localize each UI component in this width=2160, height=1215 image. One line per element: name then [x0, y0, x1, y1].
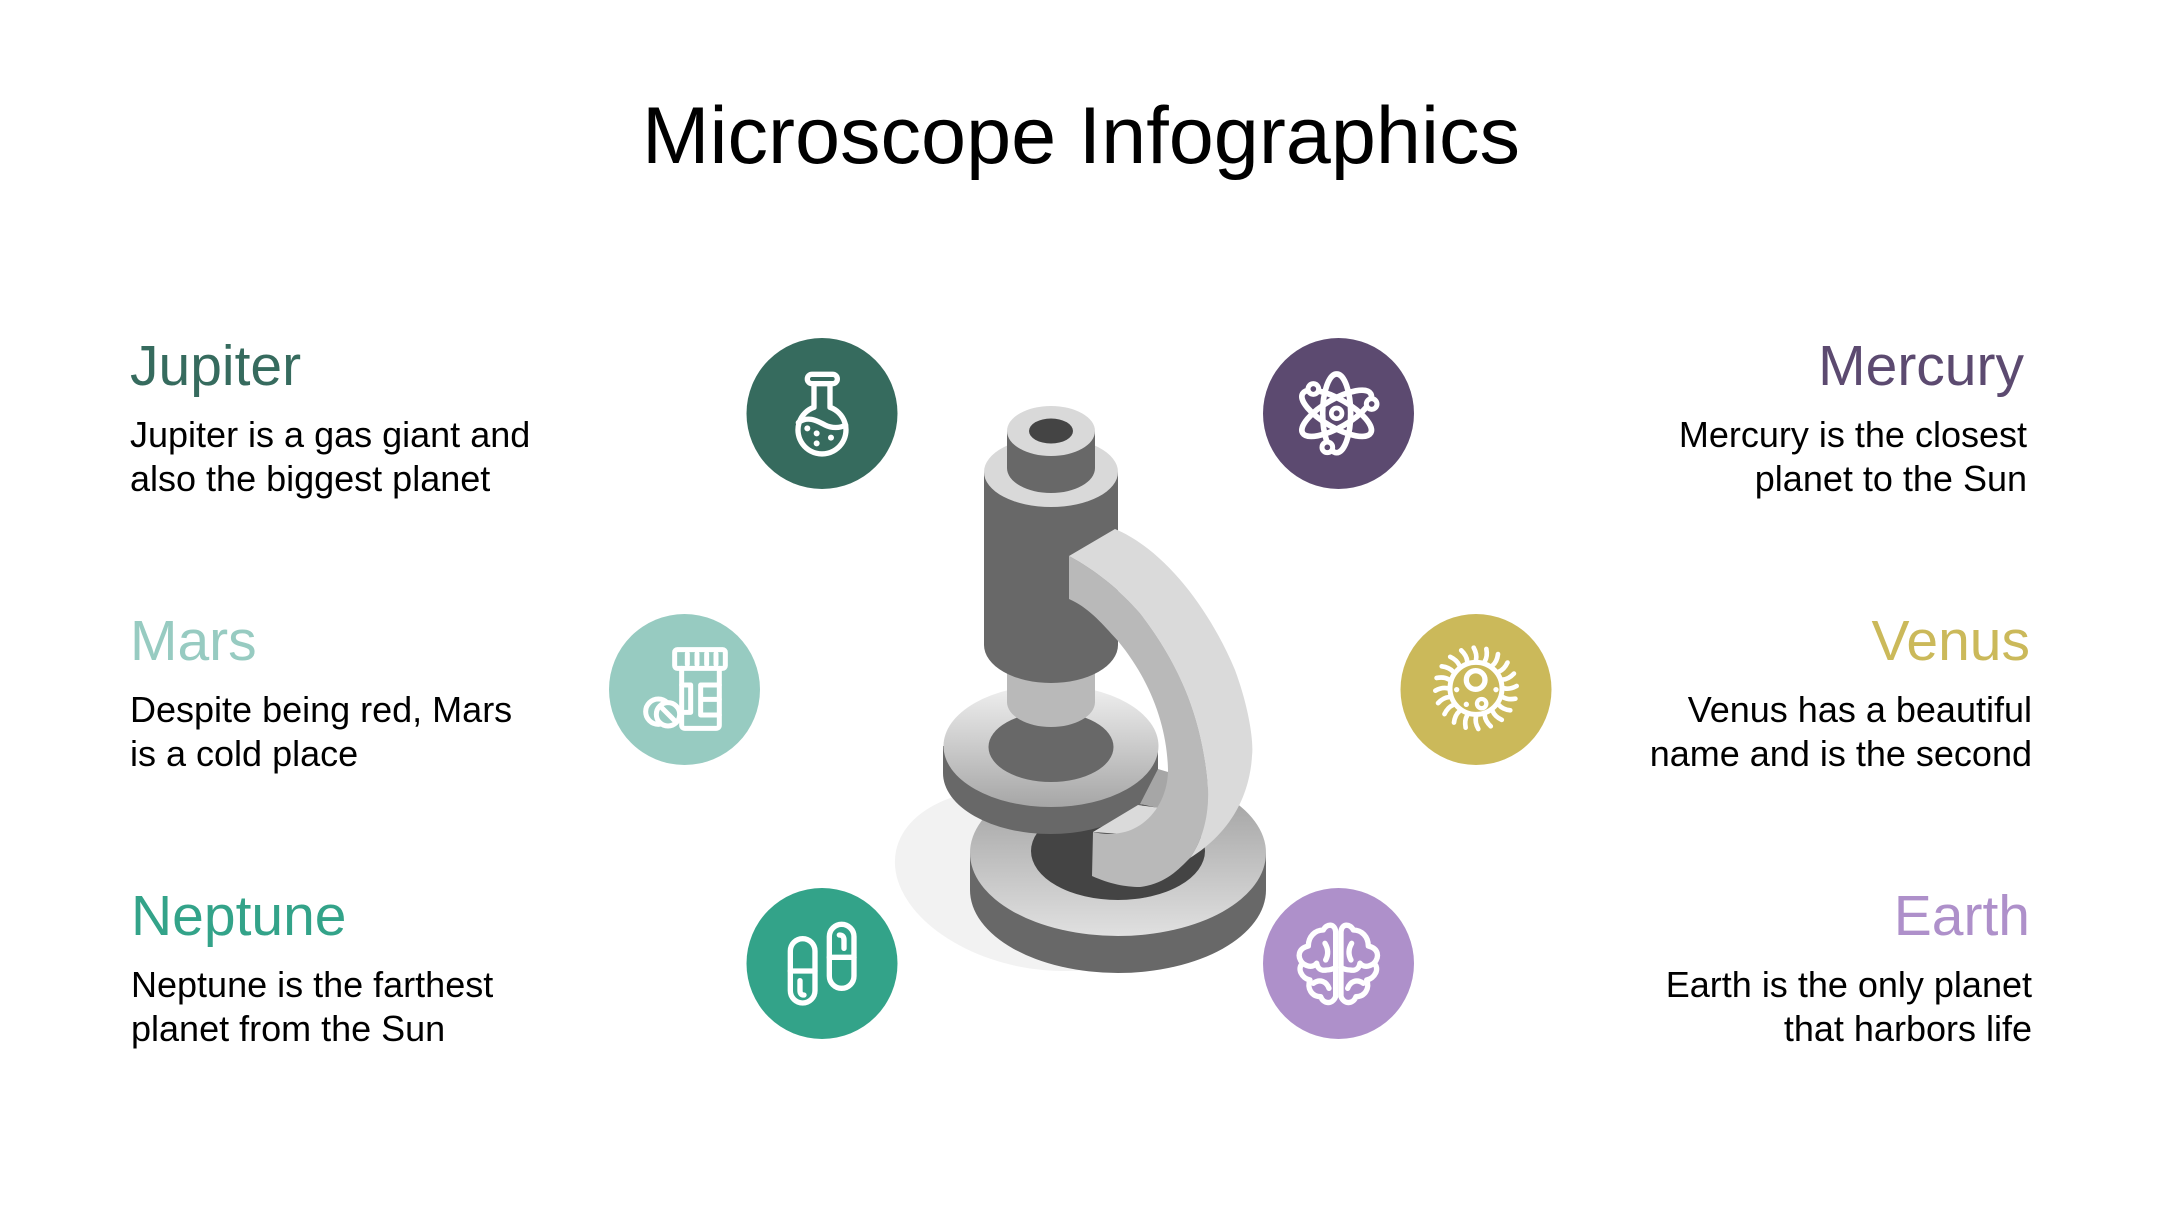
- stage: [943, 685, 1158, 834]
- body: Mercury: Mercury is the closest: [1679, 414, 2027, 455]
- icon: brain: [1299, 925, 1377, 1003]
- icon: medicine bottle: [646, 650, 725, 728]
- eyepiece: [1007, 406, 1095, 493]
- heading: Mercury: Mercury: [1818, 334, 2024, 398]
- microscope illustration: [878, 406, 1266, 996]
- body: Venus: Venus has a beautiful: [1688, 689, 2032, 730]
- icon: flask: [798, 374, 846, 454]
- connector: [1140, 769, 1168, 808]
- body: Mars: is a cold place: [130, 733, 358, 774]
- heading: Jupiter: Jupiter: [130, 334, 301, 398]
- panel: Jupiter text: [130, 334, 530, 499]
- heading: Earth: Earth: [1894, 884, 2030, 948]
- icon circle: capsules: [746, 888, 898, 1039]
- heading: Mars: Mars: [130, 609, 257, 673]
- panel: Earth text: [1666, 884, 2032, 1049]
- body: Mercury: planet to the Sun: [1755, 458, 2027, 499]
- panel: Mars text: [130, 609, 512, 774]
- body: Mars: Despite being red, Mars: [130, 689, 512, 730]
- icon circle: brain: [1263, 888, 1414, 1039]
- base: [970, 770, 1266, 973]
- tube: [984, 437, 1118, 683]
- body: Neptune: planet from the Sun: [131, 1008, 445, 1049]
- body: Earth: Earth is the only planet: [1666, 964, 2032, 1005]
- heading: Neptune: Neptune: [131, 884, 347, 948]
- title: Microscope Infographics: [642, 91, 1520, 181]
- panel: Venus text: [1650, 609, 2032, 774]
- arm: [1069, 529, 1252, 887]
- panel: Mercury text: [1679, 334, 2027, 499]
- body: Neptune: Neptune is the farthest: [131, 964, 493, 1005]
- shadow: [878, 764, 1192, 996]
- body: Jupiter: also the biggest planet: [130, 458, 490, 499]
- icon: microbe: [1435, 648, 1517, 729]
- icon circle: flask: [746, 338, 898, 489]
- body: Jupiter: Jupiter is a gas giant and: [130, 414, 530, 455]
- icon circle: medicine bottle: [609, 614, 760, 765]
- panel: Neptune text: [131, 884, 493, 1049]
- icon: capsules: [790, 924, 854, 1003]
- icon circle: atom: [1263, 338, 1414, 489]
- body: Earth: that harbors life: [1784, 1008, 2032, 1049]
- neck: [1007, 640, 1095, 727]
- body: Venus: name and is the second: [1650, 733, 2032, 774]
- icon: atom: [1296, 374, 1378, 453]
- icon circle: microbe: [1400, 614, 1552, 765]
- heading: Venus: Venus: [1872, 609, 2030, 673]
